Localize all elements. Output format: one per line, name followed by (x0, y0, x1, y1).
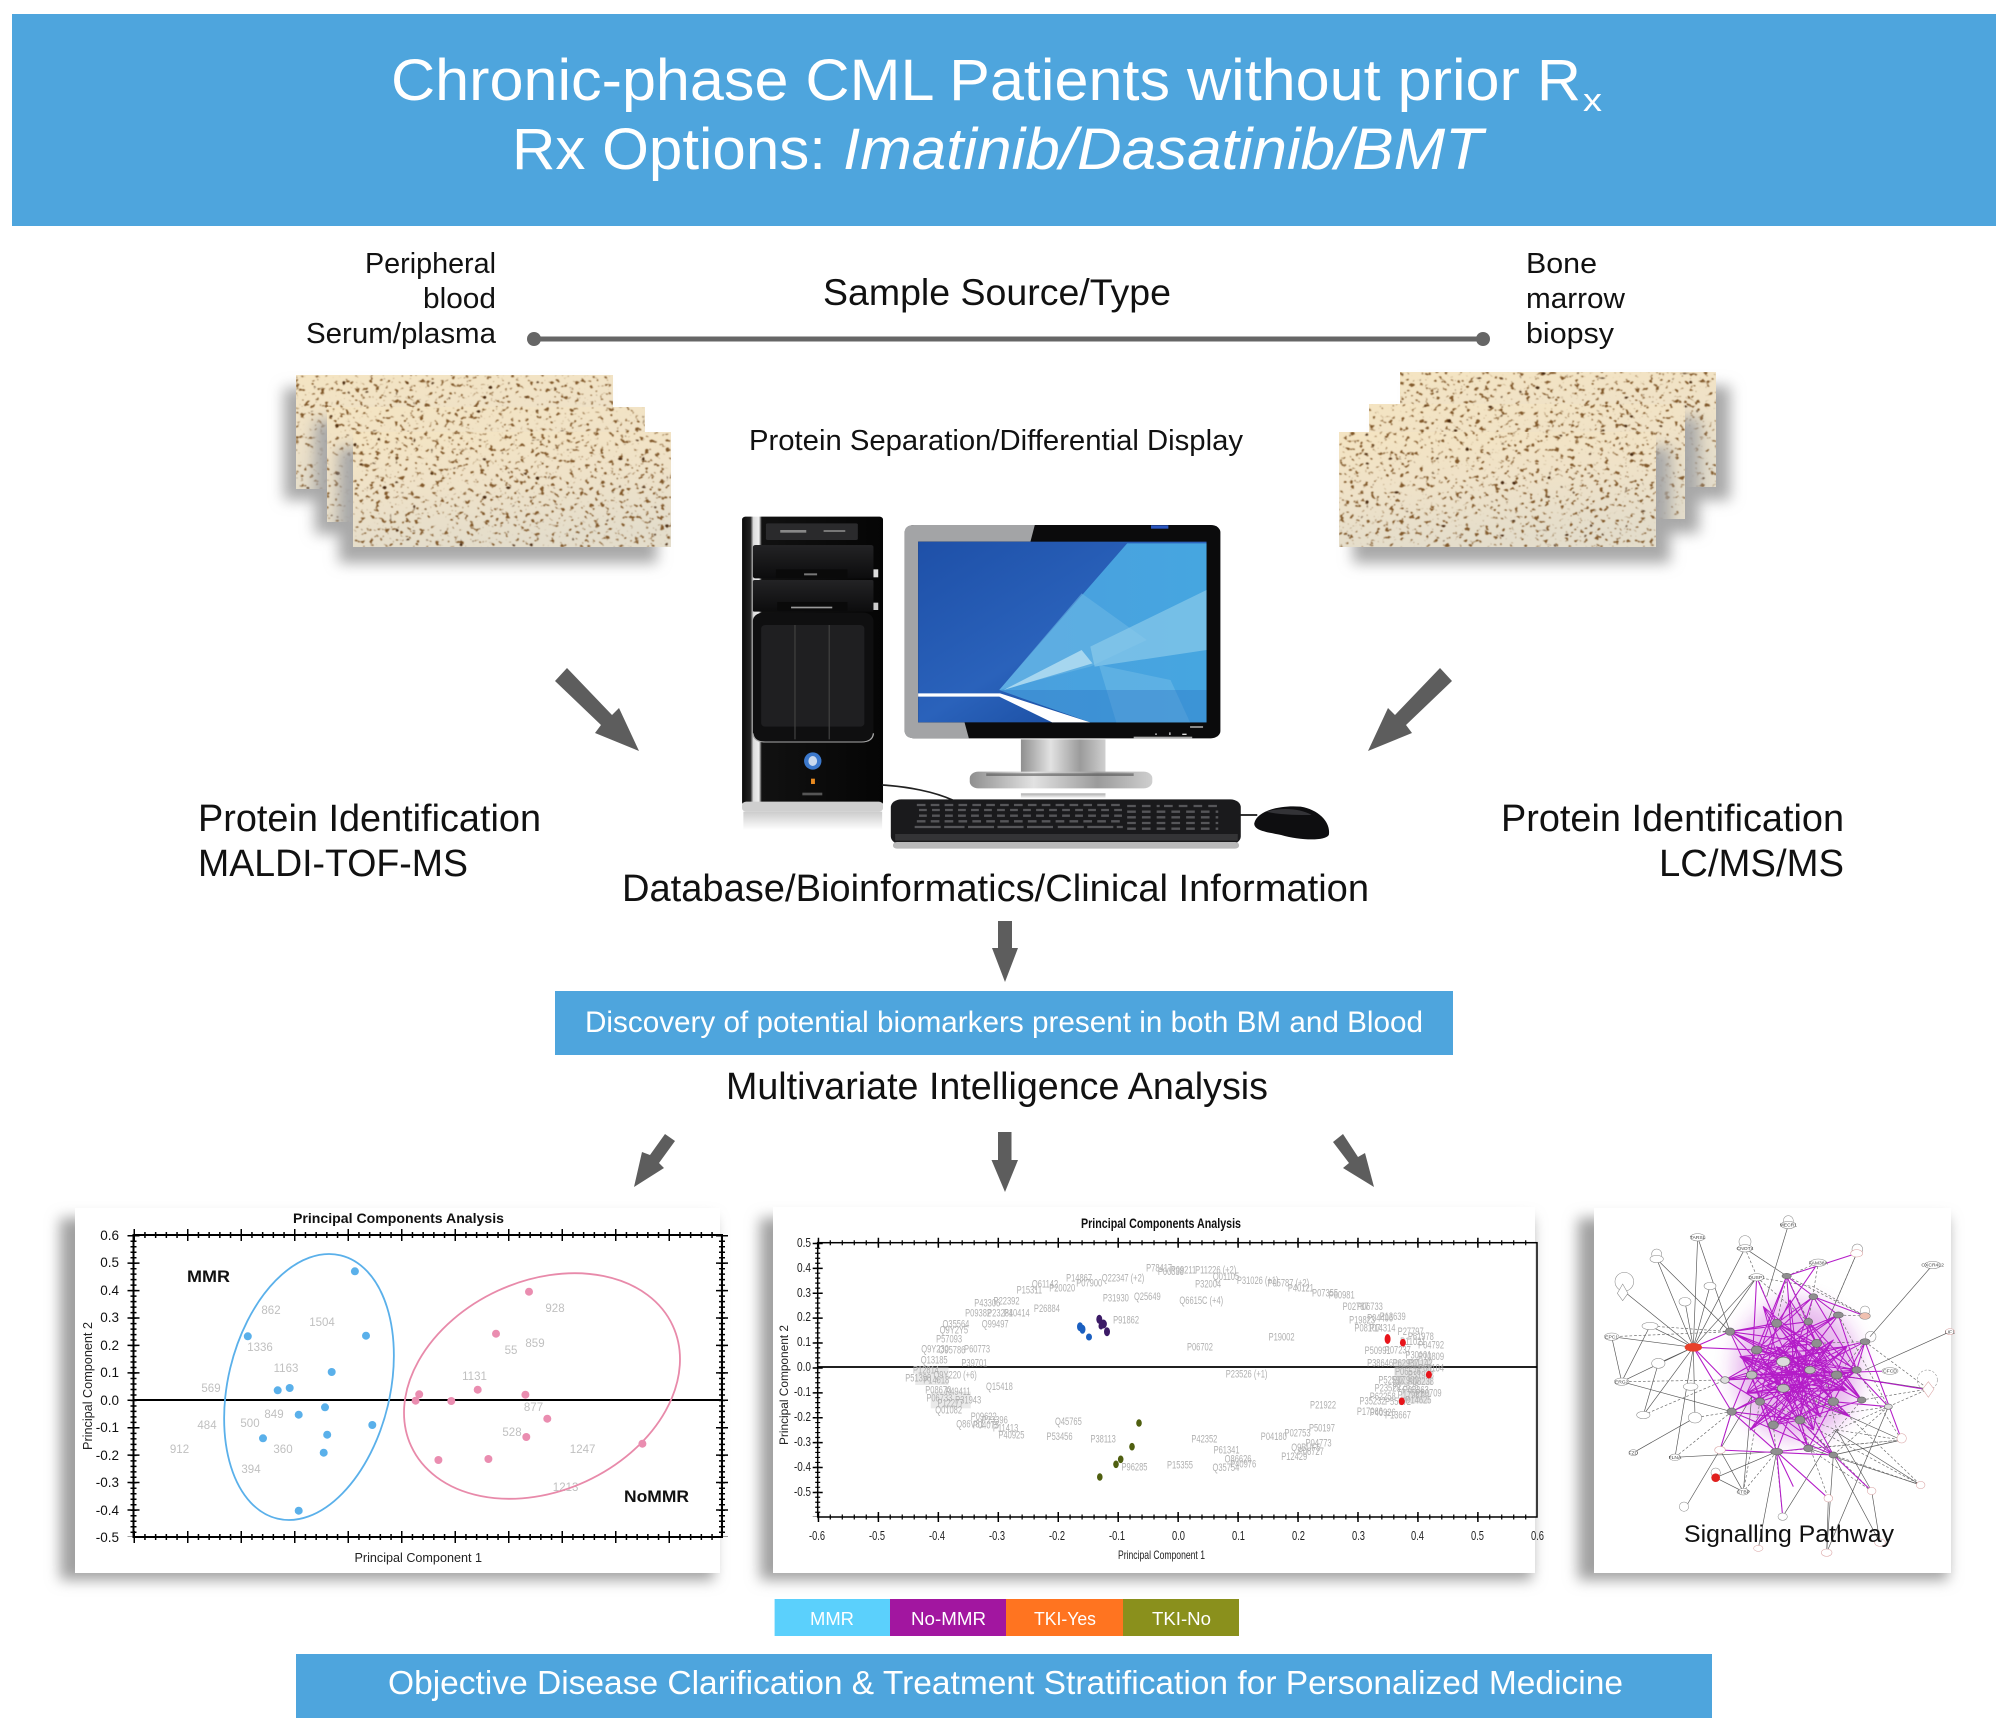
y axis labels: 0.6 (100, 1228, 119, 1243)
y axis labels: 0.3 (100, 1310, 119, 1325)
gray protein accession labels: P04075 (973, 1419, 999, 1432)
x axis labels: -0.3 (989, 1528, 1005, 1543)
gray sample ids: 1163 (274, 1363, 298, 1375)
gray protein accession labels: P23528 (1375, 1382, 1401, 1395)
callout: discovery of biomarkers (555, 991, 1453, 1055)
x axis labels: 0.3 (1352, 1528, 1365, 1543)
gray protein accession labels: P14314 (1370, 1322, 1396, 1335)
label: peripheral blood serum/plasma: Peripheral (365, 248, 496, 280)
tower (742, 517, 883, 830)
title line 2: Imatinib/Dasatinib/BMT (843, 117, 1487, 182)
gray protein accession labels: P11021 (1400, 1336, 1426, 1349)
x axis labels: 0.6 (1531, 1528, 1544, 1543)
node labels (1605, 1223, 1955, 1495)
y axis labels: -0.1 (96, 1420, 119, 1435)
TKI-Yes protein cluster (1385, 1334, 1432, 1405)
gray sample ids: 862 (261, 1305, 281, 1317)
panel: signalling pathway network (1578, 1208, 1955, 1580)
gray sample ids: 849 (264, 1409, 284, 1421)
y axis labels: 0.4 (100, 1283, 119, 1298)
gray protein accession labels: P60709 (1416, 1387, 1442, 1400)
text: protein identification MALDI: MALDI-TOF-MS (198, 843, 468, 885)
gray protein accession labels: P52597 (1378, 1374, 1404, 1387)
gray protein accession labels: Q9Y2Y5 (940, 1324, 968, 1337)
node labels: MECR1 (1780, 1223, 1797, 1229)
gray sample ids: 928 (545, 1303, 565, 1315)
gray sample ids: 569 (201, 1383, 221, 1395)
title line 1: Chronic-phase CML Patients without prior R (391, 48, 1581, 113)
y axis labels (794, 1235, 811, 1499)
title line 1: x (1583, 82, 1602, 118)
gray sample ids: 484 (197, 1420, 217, 1432)
gray protein accession labels: P15355 (1167, 1459, 1193, 1472)
node labels: DUSP1 (1748, 1275, 1765, 1281)
gray protein accession labels: P08670 (925, 1384, 951, 1397)
gray protein accession labels: Q45765 (1055, 1416, 1082, 1429)
gray protein accession labels: P27797 (1398, 1326, 1424, 1339)
hub nodes (1721, 1273, 1892, 1458)
gray protein accession labels: P17066 (1357, 1406, 1383, 1419)
gray protein accession labels: P04773 (1306, 1437, 1332, 1450)
gray protein accession labels: Q61142 (1032, 1278, 1058, 1291)
gray protein accession labels: P42352 (1191, 1433, 1217, 1446)
gray protein accession labels: P21922 (1310, 1399, 1336, 1412)
gray protein accession labels: P40925 (998, 1429, 1024, 1442)
gray protein accession labels: Q01082 (935, 1404, 962, 1417)
gray protein accession labels: Q25649 (1134, 1291, 1161, 1304)
node labels: ERG2 (1615, 1379, 1629, 1385)
y axis labels: -0.3 (96, 1475, 119, 1490)
gray protein accession labels: P08107 (1354, 1322, 1380, 1335)
node labels: FAM38A (1809, 1260, 1829, 1266)
gray sample ids: 394 (241, 1464, 261, 1476)
gray sample ids: 528 (502, 1427, 522, 1439)
y axis title: Principal Component 2 (80, 1322, 95, 1450)
arrow: down to discovery box (992, 921, 1018, 982)
No-MMR protein cluster (1096, 1315, 1110, 1336)
x axis labels: 0.1 (1232, 1528, 1245, 1543)
gray protein accession labels: Q15418 (986, 1381, 1013, 1394)
gray protein accession labels: P15311 (1017, 1284, 1042, 1297)
node labels: CNOT4 (1737, 1246, 1754, 1252)
gray protein accession labels: P10809 (1418, 1351, 1444, 1364)
gray protein accession labels: P40121 (1288, 1282, 1314, 1295)
gray protein accession labels: P61341 (1214, 1444, 1240, 1457)
gray protein accession labels: P06733 (1357, 1301, 1383, 1314)
gray sample ids: 1213 (553, 1482, 578, 1494)
plot frame and ticks (134, 1235, 722, 1537)
network diagram (1604, 1216, 1955, 1556)
group label NoMMR: NoMMR (624, 1487, 689, 1506)
gray sample ids: 1336 (247, 1342, 273, 1354)
y axis labels: 0.2 (100, 1338, 119, 1353)
gray protein accession labels: P11226 (+2) (1195, 1264, 1236, 1277)
arrow: to left plot (634, 1134, 675, 1187)
text: protein identification MALDI (198, 798, 541, 885)
gray protein accession labels: P91862 (1113, 1314, 1139, 1327)
gray protein accession labels: P31026 (+1) (1237, 1275, 1279, 1288)
gray protein accession labels: P40926 (1370, 1407, 1396, 1420)
group label MMR: MMR (187, 1267, 230, 1286)
gray protein accession labels: P00338 (1158, 1266, 1184, 1279)
heading: sample source/type: Sample Source/Type (823, 272, 1171, 313)
x axis labels: 0.4 (1411, 1528, 1424, 1543)
gray protein accession labels: P17987 (1398, 1389, 1424, 1402)
icon: desktop computer (742, 517, 1329, 849)
y axis labels: 0.1 (797, 1334, 811, 1349)
gray protein accession labels: O86626 (1225, 1453, 1251, 1466)
gray protein accession labels: P12814 (913, 1364, 940, 1377)
gray protein accession labels: P50991 (1365, 1345, 1391, 1358)
y axis labels: 0.5 (797, 1235, 811, 1250)
footer banner: Objective Disease Clarification & Treatment Stratification for Personalized Medicine (388, 1664, 1623, 1701)
gray protein accession labels: P68363 (1403, 1384, 1429, 1397)
x axis labels: -0.6 (809, 1528, 825, 1543)
gray protein accession labels: P07355 (1312, 1287, 1338, 1300)
node labels: LIF1 (1945, 1329, 1955, 1335)
2D gel stack: left (284, 375, 671, 563)
panel: PCA MMR vs NoMMR (60, 1208, 722, 1580)
outer nodes (1604, 1216, 1955, 1556)
gray protein accession labels: P31948 (1408, 1369, 1434, 1382)
y axis labels: -0.1 (794, 1384, 811, 1399)
arrow: to center plot (992, 1132, 1018, 1192)
gray protein accession labels: P19823 (1349, 1314, 1375, 1327)
gray protein accession labels: P11142 (1408, 1357, 1433, 1370)
gray protein accession labels: P22626 (1393, 1381, 1419, 1394)
gray sample ids: 877 (524, 1402, 543, 1414)
purple regulatory edges (1693, 1253, 1923, 1517)
label: peripheral blood serum/plasma: Serum/plasma (306, 318, 497, 350)
node labels: FZD (1628, 1450, 1639, 1456)
text: protein identification LC/MS/MS (1501, 798, 1844, 885)
gray protein accession labels: P14625 (1405, 1394, 1431, 1407)
gray protein accession labels: P04180 (1261, 1431, 1287, 1444)
y axis labels: 0.4 (797, 1260, 811, 1275)
gray protein accession labels: P07237 (1385, 1344, 1411, 1357)
gray protein accession labels: Q35564 (943, 1318, 970, 1331)
legend item MMR: MMR (810, 1609, 854, 1629)
2D gel stack: right (1339, 372, 1730, 563)
gray protein accession labels: P31943 (955, 1394, 981, 1407)
chart title: Principal Components Analysis (1081, 1215, 1241, 1231)
gray protein accession labels: P49411 (945, 1386, 971, 1399)
title line 2 (512, 117, 1487, 182)
gray protein accession labels: P32004 (1195, 1278, 1222, 1291)
purple density haze (1733, 1300, 1860, 1440)
footer banner (296, 1654, 1712, 1718)
label: bone marrow biopsy: Bone (1526, 248, 1597, 280)
MMR protein cluster (1077, 1322, 1092, 1340)
y axis labels: -0.5 (96, 1530, 119, 1545)
x axis labels (809, 1528, 1544, 1543)
x axis labels: -0.2 (1049, 1528, 1065, 1543)
mouse (1254, 806, 1329, 839)
gray protein accession labels: Q13185 (921, 1354, 948, 1367)
legend item No-MMR: No-MMR (911, 1609, 986, 1629)
gray edges (1612, 1225, 1950, 1553)
gray protein accession labels (905, 1262, 1445, 1475)
x axis labels: -0.1 (1109, 1528, 1125, 1543)
gray protein accession labels: P14618 (923, 1374, 949, 1387)
gray protein accession labels: Q6615C (+4) (1179, 1295, 1223, 1308)
NoMMR ellipse and points (367, 1230, 717, 1542)
legend item TKI-Yes (1006, 1599, 1123, 1636)
gray protein accession labels: P02753 (1285, 1427, 1311, 1440)
gray protein accession labels: P31930 (1103, 1292, 1129, 1305)
gray protein accession labels: P60773 (964, 1343, 990, 1356)
y axis labels: 0.0 (100, 1393, 119, 1408)
y axis labels: -0.4 (96, 1503, 119, 1518)
gray sample ids: 55 (505, 1345, 517, 1357)
gray protein accession labels: P12277 (937, 1397, 963, 1410)
gray protein accession labels: P12429 (1281, 1451, 1307, 1464)
y axis title: Principal Component 2 (777, 1325, 791, 1445)
gray protein accession labels: P23284 (987, 1307, 1014, 1320)
label: signalling pathway: Signalling Pathway (1684, 1521, 1894, 1548)
x axis labels: -0.5 (869, 1528, 885, 1543)
y axis labels: -0.5 (794, 1484, 811, 1499)
x axis labels: 0.2 (1292, 1528, 1305, 1543)
text: protein identification LC/MS/MS: LC/MS/MS (1659, 843, 1844, 885)
gray protein accession labels: P14867 (1066, 1272, 1092, 1285)
gray sample ids: 360 (273, 1444, 293, 1456)
gray protein accession labels: P09382 (965, 1307, 991, 1320)
gray protein accession labels: P13667 (1385, 1409, 1411, 1422)
y axis labels (96, 1228, 119, 1545)
title line 2: Rx Options: (512, 117, 826, 182)
gray sample ids: 912 (170, 1444, 189, 1456)
gray protein accession labels: P68104 (1418, 1362, 1445, 1375)
gray protein accession labels: P39701 (961, 1357, 987, 1370)
y axis labels: -0.2 (794, 1409, 811, 1424)
gray protein accession labels: P38646 (1367, 1357, 1393, 1370)
label: bone marrow biopsy: biopsy (1526, 318, 1615, 350)
gray protein accession labels: P06733 (926, 1392, 952, 1405)
gray protein accession labels: P19002 (1269, 1331, 1295, 1344)
gray protein accession labels: Q01105 (1213, 1271, 1239, 1284)
gray protein accession labels: P30101 (1405, 1349, 1431, 1362)
heading: multivariate intelligence analysis: Multivariate Intelligence Analysis (726, 1066, 1268, 1108)
gray protein accession labels: P43306 (974, 1297, 1000, 1310)
gray protein accession labels: P23526 (+1) (1226, 1368, 1267, 1381)
gray sample ids: 1131 (462, 1371, 487, 1383)
label: bone marrow biopsy: marrow (1526, 283, 1626, 315)
gray protein accession labels: P51398 (905, 1372, 931, 1385)
gray protein accession labels: P13639 (1380, 1311, 1406, 1324)
label: bone marrow biopsy (1526, 248, 1626, 350)
gray protein accession labels: Q86V81 (956, 1418, 984, 1431)
arrow: to pathway (1333, 1134, 1374, 1187)
gray protein accession labels: P09622 (971, 1411, 997, 1424)
legend (775, 1599, 1239, 1636)
gray protein accession labels: Q9Y230 (921, 1343, 949, 1356)
MMR ellipse and points (199, 1236, 419, 1538)
chart title: Principal Components Analysis (293, 1210, 504, 1226)
legend item TKI-No (1123, 1599, 1239, 1636)
text: database / bioinformatics: Database/Bioinformatics/Clinical Information (622, 868, 1369, 910)
gray protein accession labels: O95786 (939, 1344, 965, 1357)
label: protein separation: Protein Separation/Differential Display (749, 425, 1243, 457)
monitor stand (970, 739, 1152, 798)
gray protein accession labels: P04792 (1418, 1339, 1444, 1352)
TKI-No protein cluster (1097, 1419, 1142, 1481)
arrow: right protein identification (1368, 668, 1452, 751)
gray protein accession labels: P06576 (1395, 1366, 1421, 1379)
gray sample ids: 1504 (309, 1317, 335, 1329)
gray sample ids: 859 (525, 1338, 545, 1350)
gray protein accession labels: P08238 (1408, 1376, 1434, 1389)
legend item TKI-No: TKI-No (1152, 1609, 1211, 1629)
gray protein accession labels: P35232 (1360, 1395, 1385, 1408)
node labels: CXCR4L2 (1921, 1263, 1944, 1269)
header banner (12, 14, 1996, 226)
panel: PCA protein loadings (760, 1207, 1544, 1580)
highlighted red nodes (1685, 1343, 1720, 1482)
gray protein accession labels: P26884 (1034, 1303, 1060, 1316)
gray protein accession labels: P62258 (1370, 1391, 1396, 1404)
gray sample ids (170, 1303, 595, 1494)
node labels: EPC1 (1605, 1334, 1618, 1340)
gray protein accession labels: P22392 (994, 1295, 1020, 1308)
y axis labels: 0.5 (100, 1255, 119, 1270)
gray protein accession labels: P02787 (1343, 1301, 1369, 1314)
gray protein accession labels: P78417 (1146, 1262, 1172, 1275)
gray protein accession labels: P57093 (936, 1333, 962, 1346)
gray protein accession labels: P61978 (1408, 1331, 1434, 1344)
y axis labels: -0.3 (794, 1434, 811, 1449)
gray sample ids: 1247 (570, 1444, 595, 1456)
y axis labels: 0.3 (797, 1285, 811, 1300)
x axis labels: 0.0 (1172, 1528, 1185, 1543)
label: peripheral blood serum/plasma: blood (423, 283, 496, 315)
node labels: CTBP (1737, 1489, 1751, 1495)
gray protein accession labels: P38113 (1090, 1433, 1116, 1446)
sample source spectrum line (527, 332, 1490, 346)
label: peripheral blood serum/plasma (306, 248, 497, 350)
x axis labels: -0.4 (929, 1528, 945, 1543)
gray protein accession labels: P06702 (1187, 1341, 1213, 1354)
gray protein accession labels: Q99497 (982, 1318, 1009, 1331)
gray protein accession labels: P09211 (1171, 1264, 1196, 1277)
monitor (905, 525, 1220, 739)
gray protein accession labels: P06727 (1298, 1446, 1324, 1459)
gray protein accession labels: P60981 (1329, 1289, 1355, 1302)
gray protein accession labels: Q35754 (1212, 1462, 1240, 1475)
node labels: CFCD (1883, 1369, 1897, 1375)
gray protein accession labels: Q9BUF5 (1291, 1442, 1321, 1455)
gray protein accession labels: Q22347 (+2) (1102, 1272, 1144, 1285)
y axis labels: 0.0 (797, 1359, 811, 1374)
arrow: left protein identification (555, 668, 639, 751)
gray protein accession labels: Q9Y220 (+6) (933, 1369, 977, 1382)
gray protein accession labels: P07900 (1393, 1374, 1419, 1387)
callout: discovery of biomarkers: Discovery of potential biomarkers present in both BM and Blood (585, 1006, 1423, 1039)
node labels: TARSL (1690, 1235, 1706, 1241)
gray protein accession labels: P20020 (1049, 1282, 1075, 1295)
y axis labels: 0.2 (797, 1309, 811, 1324)
gray protein accession labels: P23396 (982, 1414, 1008, 1427)
gray protein accession labels: P07900 (1076, 1277, 1102, 1290)
gray protein accession labels: P53456 (1047, 1431, 1073, 1444)
y axis labels: 0.1 (100, 1365, 119, 1380)
legend item MMR (775, 1599, 890, 1636)
legend item TKI-Yes: TKI-Yes (1034, 1609, 1096, 1629)
gray protein accession labels: P11413 (993, 1422, 1018, 1435)
y axis labels: -0.4 (794, 1459, 811, 1474)
gray protein accession labels: P40976 (1230, 1458, 1256, 1471)
node labels: FLNA (1669, 1455, 1682, 1461)
x axis labels: 0.5 (1471, 1528, 1484, 1543)
y axis labels: -0.2 (96, 1448, 119, 1463)
x axis title: Principal Component 1 (354, 1550, 482, 1565)
x axis title: Principal Component 1 (1118, 1548, 1205, 1562)
gray protein accession labels: P10414 (1004, 1307, 1030, 1320)
plot frame and ticks (818, 1243, 1537, 1517)
gray protein accession labels: P96285 (1122, 1461, 1147, 1474)
keyboard (882, 785, 1257, 849)
gray protein accession labels: P55072 (1385, 1396, 1411, 1409)
gray protein accession labels: P50197 (1309, 1422, 1335, 1435)
text: protein identification LC/MS/MS: Protein Identification (1501, 798, 1844, 840)
gray protein accession labels: P04406 (1367, 1312, 1393, 1325)
text: protein identification MALDI: Protein Identification (198, 798, 541, 840)
gray sample ids: 500 (240, 1418, 260, 1430)
legend item No-MMR (890, 1599, 1006, 1636)
gray protein accession labels: P05787 (+2) (1267, 1277, 1309, 1290)
gray protein accession labels: P62937 (1393, 1357, 1419, 1370)
